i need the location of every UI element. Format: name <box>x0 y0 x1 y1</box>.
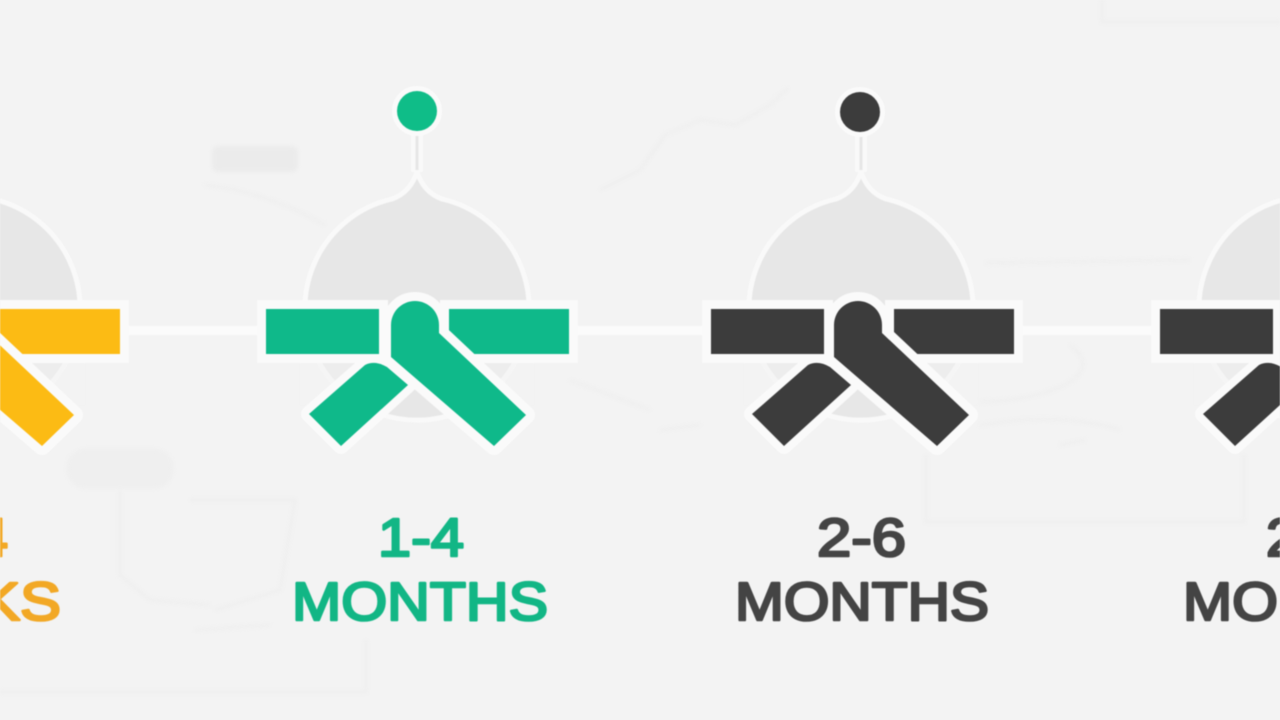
stage: black belt <box>711 92 1014 632</box>
icon: green belt sash <box>266 309 569 354</box>
label: next duration unit: MO <box>1183 572 1278 632</box>
stage: yellow belt <box>0 132 120 632</box>
icon: black belt sash <box>711 309 1014 354</box>
icon: black belt knot <box>752 301 969 446</box>
icon: next black belt knot <box>1203 301 1280 446</box>
icon: next black belt sash <box>1160 309 1280 354</box>
icon: black dot <box>840 92 880 132</box>
label: green duration number: 1-4 <box>378 508 464 568</box>
label: black duration unit: MONTHS <box>735 572 989 632</box>
icon: yellow belt bell <box>0 132 85 420</box>
icon: black belt bell <box>744 132 978 420</box>
timeline connector <box>0 326 1280 335</box>
icon: yellow belt sash <box>0 309 120 354</box>
icon: green dot <box>397 91 437 131</box>
icon: next black belt bell <box>1194 132 1280 420</box>
label: green duration unit: MONTHS <box>292 572 548 632</box>
icon: green belt knot <box>309 301 526 446</box>
stage: next black belt <box>1160 132 1280 632</box>
stage: green belt <box>266 91 569 632</box>
icon: yellow belt knot <box>0 301 74 446</box>
icon: green belt bell <box>300 132 534 420</box>
label: black duration number: 2-6 <box>817 508 906 568</box>
